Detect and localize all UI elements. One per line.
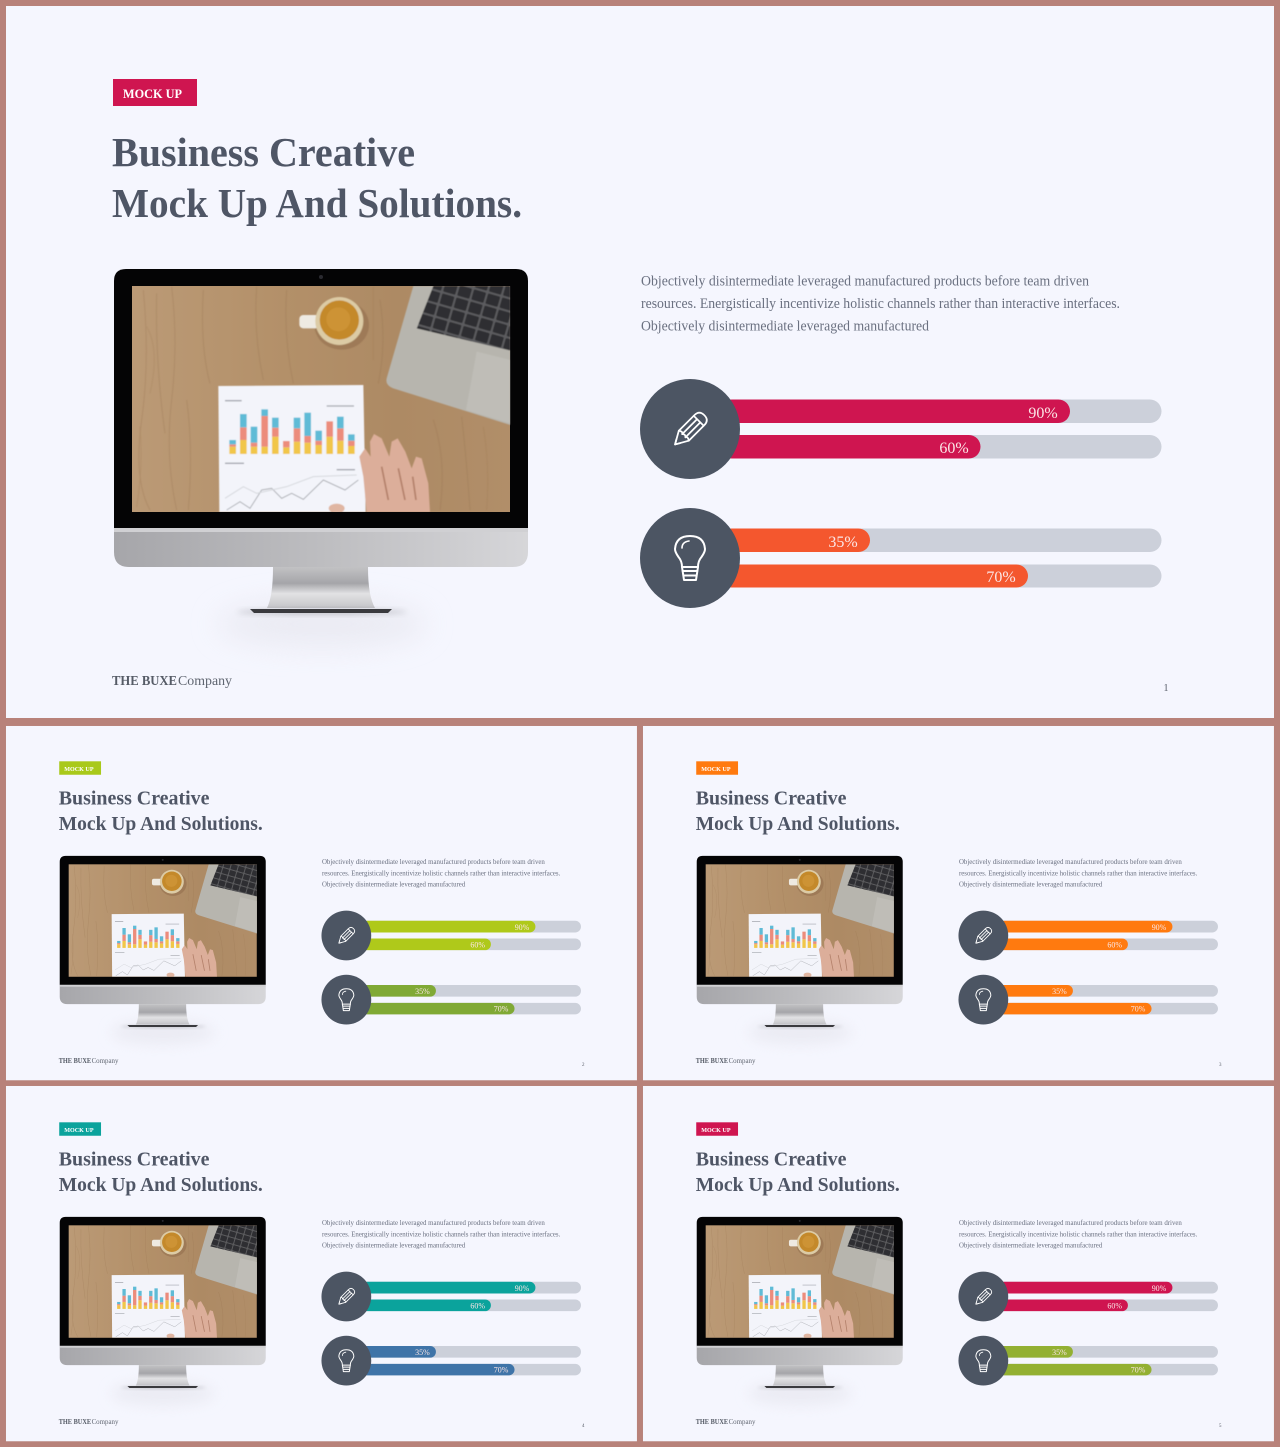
monitor mockup	[60, 1217, 266, 1405]
body text: resources. Energistically incentivize holistic channels rather than interactive interfaces.	[959, 869, 1198, 877]
body text: Objectively disintermediate leveraged manufactured products before team driven	[322, 1219, 545, 1227]
progress bars: bulb group: 70%	[986, 569, 1016, 586]
icon: light bulb	[958, 975, 1008, 1025]
progress bars: bulb group: 35%	[415, 987, 430, 996]
footer brand: Company	[178, 674, 232, 689]
title: Business Creative	[59, 1149, 210, 1171]
title: Mock Up And Solutions.	[59, 813, 263, 835]
progress bars: bulb group: 70%	[494, 1366, 509, 1375]
icon: pencil	[640, 379, 740, 479]
body text: Objectively disintermediate leveraged manufactured	[322, 880, 466, 888]
body text	[959, 858, 1198, 888]
icon: pencil	[321, 911, 371, 960]
body text	[322, 1219, 561, 1249]
progress bars: bulb group	[361, 985, 581, 1014]
footer brand: Company	[729, 1418, 756, 1426]
body text: Objectively disintermediate leveraged manufactured products before team driven	[959, 858, 1182, 866]
title: Business Creative	[112, 129, 415, 175]
progress bars: pencil group: 60%	[939, 440, 969, 457]
progress bars: bulb group: 35%	[1052, 1348, 1067, 1357]
body text: Objectively disintermediate leveraged manufactured	[322, 1241, 466, 1249]
icon: pencil	[321, 1272, 371, 1321]
footer brand: Company	[92, 1057, 119, 1065]
title	[696, 1149, 900, 1196]
icon: light bulb	[321, 975, 371, 1025]
tag: mock up	[696, 1122, 738, 1136]
icon: pencil	[958, 1272, 1008, 1321]
footer brand	[112, 674, 232, 689]
progress bars: pencil group	[361, 921, 581, 950]
body text	[959, 1219, 1198, 1249]
tag: mock up	[696, 761, 738, 775]
title: Mock Up And Solutions.	[696, 813, 900, 835]
progress bars: bulb group: 70%	[494, 1005, 509, 1014]
footer brand: Company	[729, 1057, 756, 1065]
title: Mock Up And Solutions.	[112, 180, 522, 226]
monitor mockup	[114, 269, 528, 648]
footer brand: THE BUXE	[112, 674, 177, 689]
page number: 1	[1164, 683, 1168, 694]
footer brand	[59, 1057, 119, 1065]
panel: large slide 1	[6, 6, 1274, 718]
progress bars: pencil group: 90%	[515, 1284, 530, 1293]
monitor mockup	[697, 856, 903, 1044]
body text: Objectively disintermediate leveraged manufactured	[959, 1241, 1103, 1249]
body text: Objectively disintermediate leveraged manufactured products before team driven	[959, 1219, 1182, 1227]
footer brand: THE BUXE	[59, 1418, 91, 1426]
progress bars: pencil group: 90%	[515, 923, 530, 932]
progress bars: pencil group: 60%	[1107, 1301, 1122, 1310]
title	[696, 788, 900, 835]
progress bars: pencil group: 60%	[470, 1301, 485, 1310]
body text: Objectively disintermediate leveraged manufactured	[641, 318, 930, 334]
page number: 3	[1219, 1063, 1222, 1068]
tag: mock up: MOCK UP	[701, 1127, 731, 1134]
progress bars: bulb group: 70%	[1131, 1005, 1146, 1014]
footer brand	[696, 1057, 756, 1065]
body text: Objectively disintermediate leveraged manufactured products before team driven	[641, 274, 1090, 290]
body text: resources. Energistically incentivize holistic channels rather than interactive interfaces.	[959, 1230, 1198, 1238]
title: Business Creative	[696, 788, 847, 810]
title: Mock Up And Solutions.	[696, 1174, 900, 1196]
body text: resources. Energistically incentivize holistic channels rather than interactive interfaces.	[641, 296, 1120, 312]
body text: Objectively disintermediate leveraged manufactured	[959, 880, 1103, 888]
tag: mock up	[59, 761, 101, 775]
progress bars: pencil group	[998, 1282, 1218, 1311]
title: Mock Up And Solutions.	[59, 1174, 263, 1196]
panel: slide 2 green	[6, 726, 637, 1080]
monitor mockup	[60, 856, 266, 1044]
progress bars: bulb group: 35%	[1052, 987, 1067, 996]
page number: 2	[582, 1063, 585, 1068]
progress bars: bulb group: 35%	[415, 1348, 430, 1357]
progress bars: pencil group: 60%	[1107, 940, 1122, 949]
progress bars: pencil group: 90%	[1152, 923, 1167, 932]
body text: resources. Energistically incentivize holistic channels rather than interactive interfaces.	[322, 869, 561, 877]
tag: mock up	[113, 79, 197, 106]
progress bars: bulb group: 35%	[828, 534, 858, 551]
footer brand: Company	[92, 1418, 119, 1426]
footer brand	[696, 1418, 756, 1426]
title	[112, 129, 522, 226]
tag: mock up	[59, 1122, 101, 1136]
title: Business Creative	[696, 1149, 847, 1171]
footer brand: THE BUXE	[59, 1057, 91, 1065]
page number: 5	[1219, 1424, 1222, 1429]
title: Business Creative	[59, 788, 210, 810]
progress bars: bulb group	[998, 1346, 1218, 1375]
body text	[322, 858, 561, 888]
progress bars: bulb group: 70%	[1131, 1366, 1146, 1375]
footer brand: THE BUXE	[696, 1057, 728, 1065]
icon: pencil	[958, 911, 1008, 960]
tag: mock up: MOCK UP	[123, 86, 182, 101]
panel: slide 4 teal	[6, 1086, 637, 1441]
progress bars: pencil group	[361, 1282, 581, 1311]
body text: Objectively disintermediate leveraged manufactured products before team driven	[322, 858, 545, 866]
footer brand	[59, 1418, 119, 1426]
body text	[641, 274, 1120, 334]
footer brand: THE BUXE	[696, 1418, 728, 1426]
icon: light bulb	[640, 508, 740, 608]
progress bars: bulb group	[720, 528, 1162, 588]
progress bars: pencil group: 90%	[1152, 1284, 1167, 1293]
icon: light bulb	[321, 1336, 371, 1386]
title	[59, 788, 263, 835]
panel: slide 3 orange	[643, 726, 1274, 1080]
icon: light bulb	[958, 1336, 1008, 1386]
panel: slide 5 crimson and olive	[643, 1086, 1274, 1441]
tag: mock up: MOCK UP	[701, 766, 731, 773]
progress bars: pencil group: 60%	[470, 940, 485, 949]
body text: resources. Energistically incentivize holistic channels rather than interactive interfaces.	[322, 1230, 561, 1238]
progress bars: pencil group	[998, 921, 1218, 950]
progress bars: bulb group	[361, 1346, 581, 1375]
progress bars: pencil group	[720, 400, 1162, 458]
progress bars: pencil group: 90%	[1028, 405, 1058, 422]
page number: 4	[582, 1424, 585, 1429]
tag: mock up: MOCK UP	[64, 766, 94, 773]
progress bars: bulb group	[998, 985, 1218, 1014]
tag: mock up: MOCK UP	[64, 1127, 94, 1134]
monitor mockup	[697, 1217, 903, 1405]
title	[59, 1149, 263, 1196]
